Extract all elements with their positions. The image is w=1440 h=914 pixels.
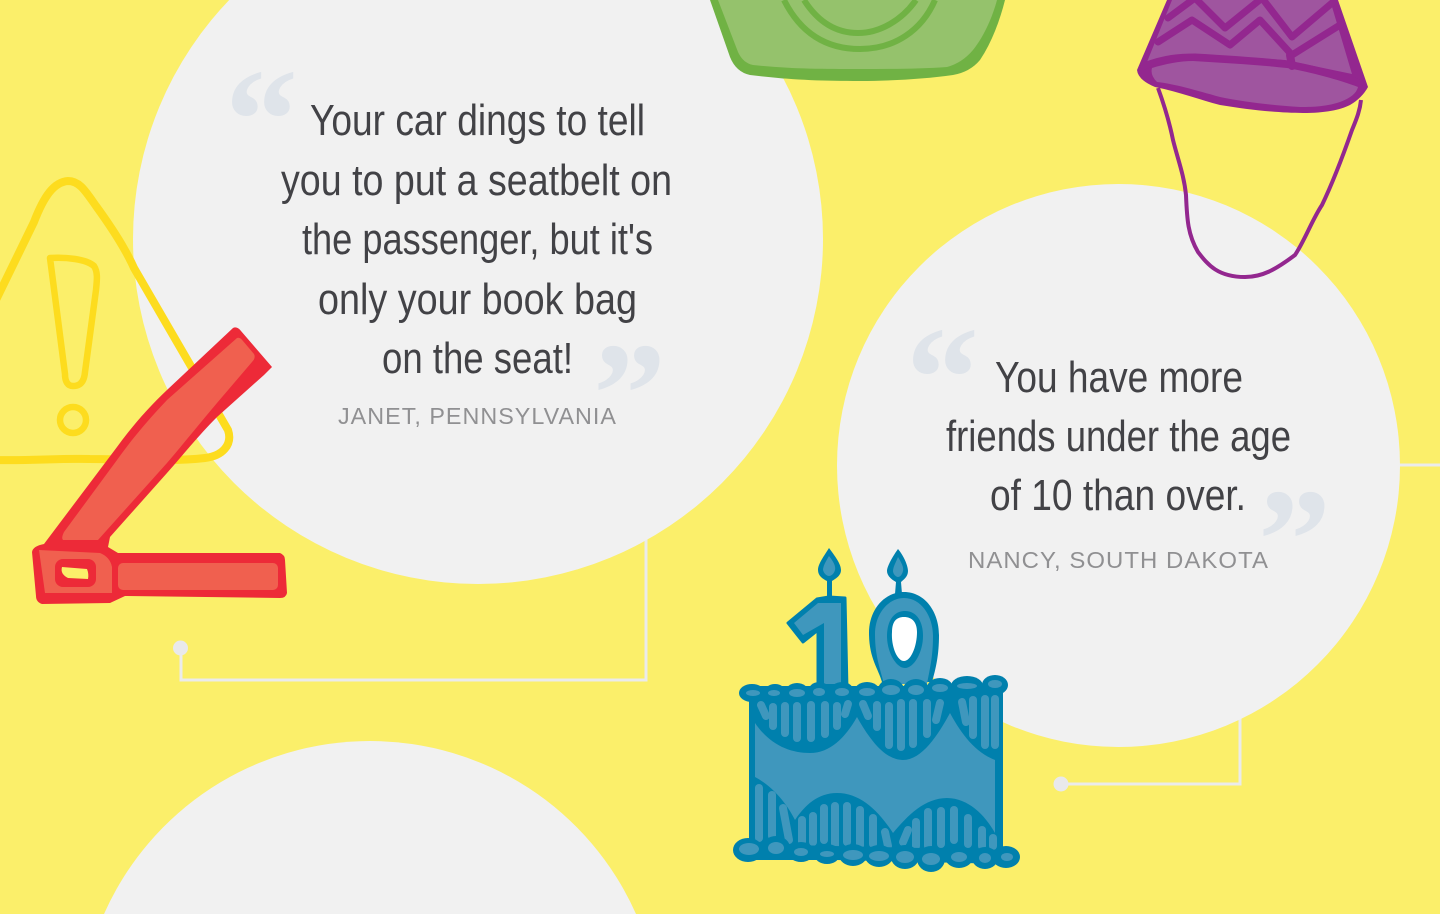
closing quote mark: ” bbox=[1258, 459, 1331, 621]
icon: purple party hat with string bbox=[1137, 0, 1368, 277]
cake top icing band bbox=[739, 675, 1008, 703]
connector dot: left bbox=[173, 640, 188, 656]
quote text: Janet: Your car dings to tell bbox=[310, 96, 645, 145]
icing beads bbox=[739, 680, 1013, 865]
quote text: Nancy: of 10 than over. bbox=[990, 471, 1246, 520]
icon: birthday cake with 10 candles bbox=[733, 548, 1020, 872]
quote text: Janet: you to put a seatbelt on bbox=[281, 156, 672, 205]
candle number 0 bbox=[869, 549, 939, 684]
quote text: Janet: on the seat! bbox=[382, 334, 573, 383]
attribution: Janet: JANET, PENNSYLVANIA bbox=[338, 403, 617, 429]
cake bottom icing band bbox=[733, 836, 1020, 872]
candle number 1 bbox=[788, 548, 847, 690]
quote text: Janet: only your book bag bbox=[318, 275, 637, 324]
cake body bbox=[749, 688, 1003, 860]
panel: bottom quote circle bbox=[104, 741, 636, 914]
icon: green bag bbox=[710, 0, 1005, 81]
closing quote mark: ” bbox=[593, 313, 666, 475]
connector dot: right bbox=[1054, 776, 1068, 792]
quote text: Nancy: friends under the age bbox=[946, 412, 1291, 461]
attribution: Nancy: NANCY, SOUTH DAKOTA bbox=[968, 547, 1269, 573]
opening quote mark: “ bbox=[225, 39, 298, 201]
cake top swag stripes bbox=[761, 699, 995, 747]
quote text: Nancy: You have more bbox=[995, 353, 1243, 402]
quote text: Nancy bbox=[946, 353, 1291, 520]
panel: Nancy quote circle bbox=[837, 184, 1400, 747]
panel: Janet quote circle bbox=[133, 0, 823, 584]
icon: seatbelt bbox=[32, 327, 287, 604]
quote text: Janet: the passenger, but it's bbox=[302, 215, 653, 264]
quote text: Janet bbox=[281, 96, 672, 383]
opening quote mark: “ bbox=[906, 297, 979, 459]
icon: warning triangle bbox=[0, 181, 229, 460]
cake bottom swag stripes bbox=[759, 788, 993, 846]
cake middle panel bbox=[755, 713, 995, 833]
